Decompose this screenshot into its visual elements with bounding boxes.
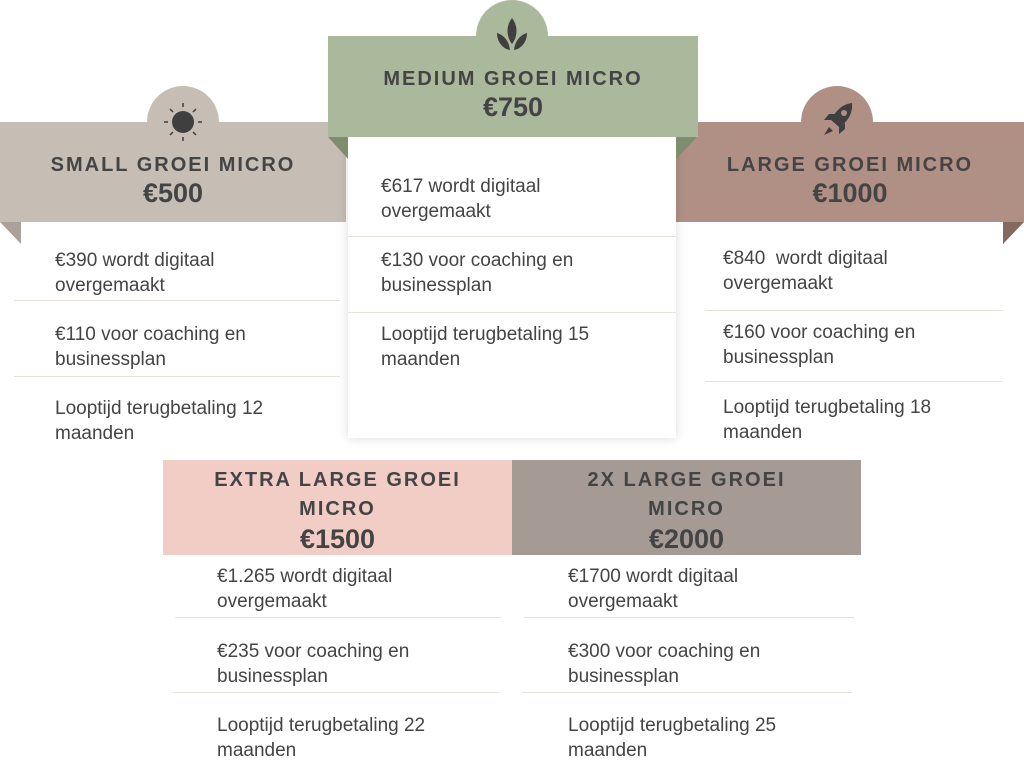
banner: medium: €750: [483, 92, 543, 122]
banner: large: LARGE GROEI MICRO: [727, 154, 973, 176]
panel: small: overgemaakt: [55, 275, 165, 296]
banner: small: [0, 122, 346, 222]
panel: extra large: €1.265 wordt digitaal: [217, 566, 392, 587]
panel: large: maanden: [723, 422, 802, 443]
panel: extra large: EXTRA LARGE GROEI: [214, 469, 461, 491]
panel: medium: €130 voor coaching en: [381, 250, 573, 271]
panel: small: businessplan: [55, 349, 166, 370]
panel: medium: [328, 0, 698, 442]
panel: small: €390 wordt digitaal: [55, 250, 214, 271]
fold: [1003, 222, 1024, 244]
panel: small: Looptijd terugbetaling 12: [55, 398, 263, 419]
panel: large: overgemaakt: [723, 273, 833, 294]
card: [348, 137, 676, 438]
panel: extra large: maanden: [217, 740, 296, 761]
banner: medium: MEDIUM GROEI MICRO: [383, 68, 643, 90]
tab: [801, 86, 873, 158]
panel: extra large: overgemaakt: [217, 591, 327, 612]
tab: [147, 86, 219, 158]
panel: large: €160 voor coaching en: [723, 322, 915, 343]
banner: small: SMALL GROEI MICRO: [51, 154, 295, 176]
panel: large: €840 wordt digitaal: [723, 248, 888, 269]
panel: large: businessplan: [723, 347, 834, 368]
tab: [476, 0, 548, 72]
panel: medium: maanden: [381, 349, 460, 370]
folds: [328, 137, 348, 159]
panel: 2x large: Looptijd terugbetaling 25: [568, 715, 776, 736]
banner: large: €1000: [812, 178, 888, 208]
panel: small: [0, 86, 346, 444]
fold: [0, 222, 21, 244]
banner: small: €500: [143, 178, 203, 208]
panel: extra large: [163, 460, 512, 761]
panel: extra large: €235 voor coaching en: [217, 641, 409, 662]
panel: small: maanden: [55, 423, 134, 444]
banner: large: [676, 122, 1024, 222]
panel: 2x large: €1700 wordt digitaal: [568, 566, 738, 587]
panel: medium: €617 wordt digitaal: [381, 176, 540, 197]
panel: large: Looptijd terugbetaling 18: [723, 397, 931, 418]
panel: medium: businessplan: [381, 275, 492, 296]
panel: 2x large: MICRO: [648, 498, 725, 520]
panel: 2x large: [512, 460, 861, 761]
banner: medium: [328, 36, 698, 137]
panel: 2x large: maanden: [568, 740, 647, 761]
panel: extra large: Looptijd terugbetaling 22: [217, 715, 425, 736]
panel: small: €110 voor coaching en: [55, 324, 246, 345]
panel: extra large: businessplan: [217, 666, 328, 687]
panel: 2x large: overgemaakt: [568, 591, 678, 612]
panel: medium: Looptijd terugbetaling 15: [381, 324, 589, 345]
panel: 2x large: €2000: [649, 524, 724, 554]
panel: medium: overgemaakt: [381, 201, 491, 222]
icon: leaves: [497, 18, 527, 50]
panel: extra large: MICRO: [299, 498, 376, 520]
icon: sun: [164, 103, 202, 141]
panel: 2x large: businessplan: [568, 666, 679, 687]
panel: 2x large: €300 voor coaching en: [568, 641, 760, 662]
panel: 2x large: 2X LARGE GROEI: [587, 469, 786, 491]
icon: rocket: [824, 103, 852, 135]
panel: extra large: €1500: [300, 524, 375, 554]
panel: large: [676, 86, 1024, 443]
